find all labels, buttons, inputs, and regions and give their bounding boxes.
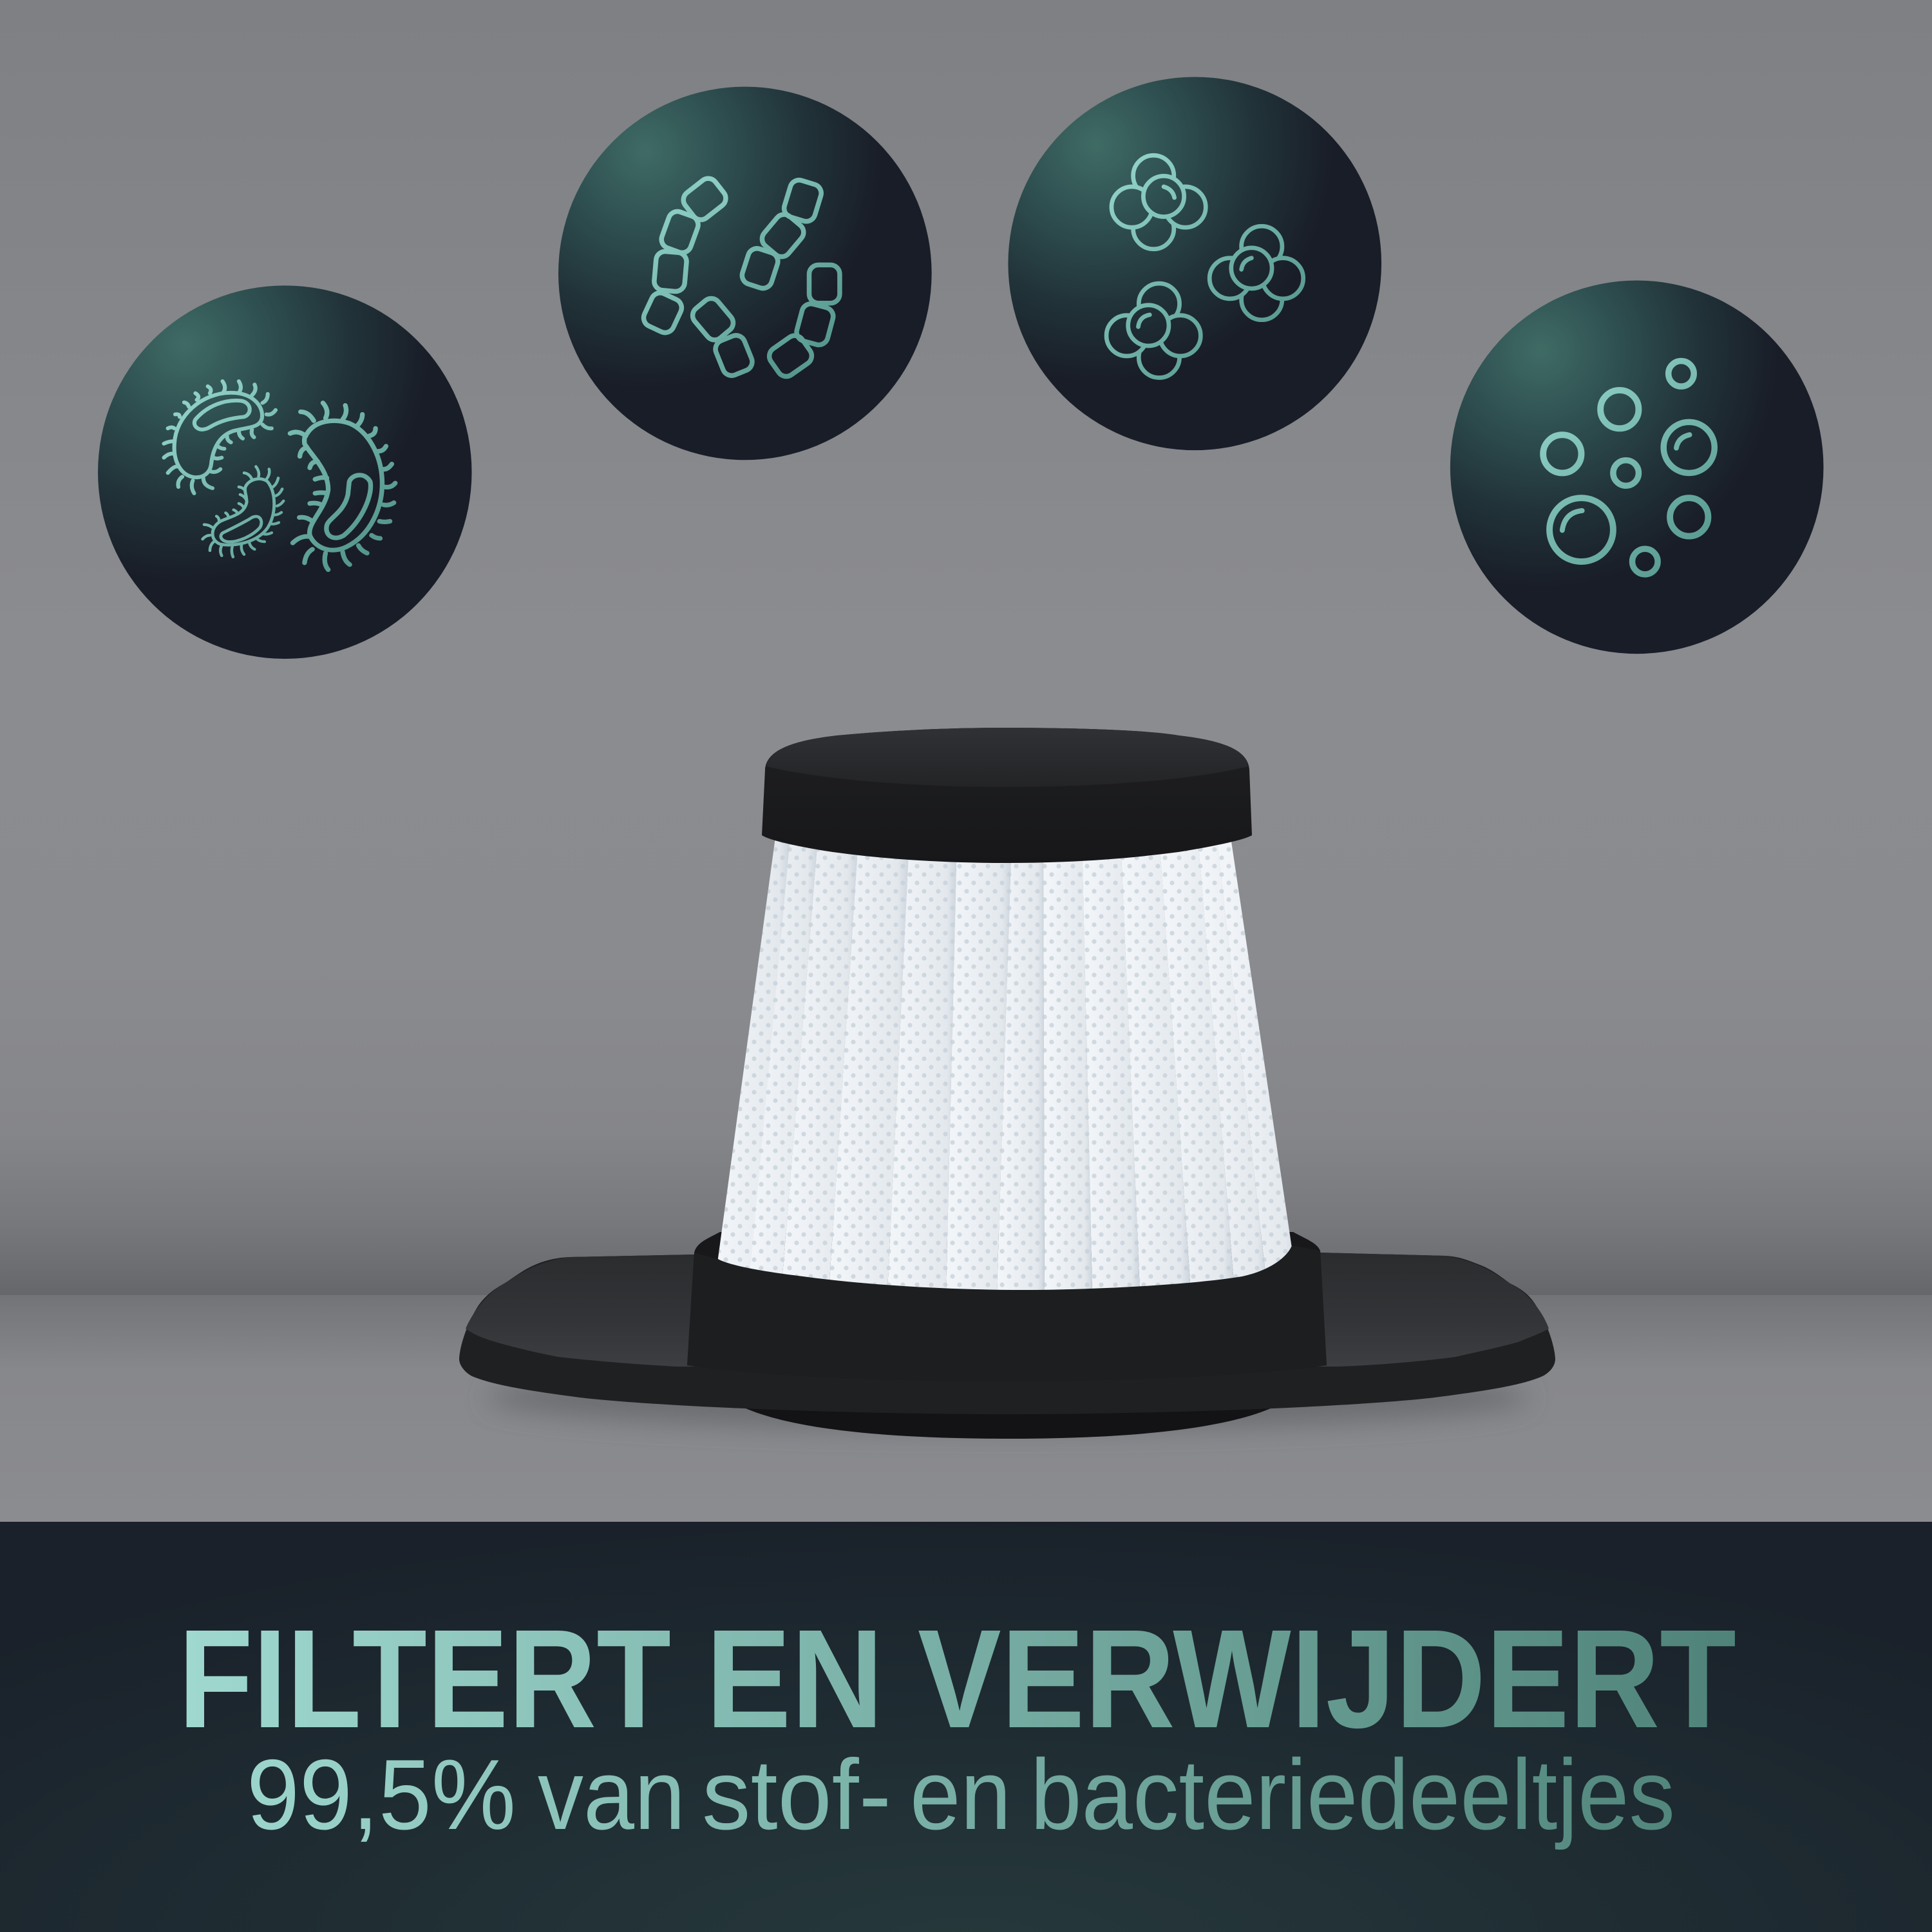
background wall	[0, 0, 1932, 1295]
subtitle: en	[910, 1739, 1011, 1850]
base plate rim	[459, 1253, 1555, 1414]
title: EN	[706, 1601, 884, 1757]
subtitle	[247, 1739, 1675, 1850]
product: vacuum filter	[459, 728, 1555, 1439]
bottom caption band	[0, 1522, 1932, 1932]
cap top surface	[766, 728, 1248, 787]
subtitle: stof-	[702, 1739, 891, 1850]
title: FILTERT	[178, 1601, 671, 1757]
title	[178, 1601, 1736, 1757]
icon disc: dust clusters	[1008, 77, 1381, 450]
floor surface	[0, 1295, 1932, 1522]
icon disc: bubbles	[1450, 281, 1824, 654]
subtitle: van	[538, 1739, 685, 1850]
pleated filter paper	[708, 837, 1301, 1291]
product shadow	[486, 1365, 1530, 1430]
top cap	[762, 728, 1252, 863]
subtitle: 99,5%	[247, 1739, 516, 1850]
collar body and rear rim	[687, 1232, 1327, 1381]
lower hub	[730, 1401, 1286, 1439]
front collar	[687, 1245, 1327, 1381]
base plate surface	[466, 1253, 1549, 1367]
title: VERWIJDERT	[918, 1601, 1736, 1757]
icon disc: curved bacteria	[98, 285, 472, 659]
icon disc: rod bacteria chains	[558, 87, 932, 460]
subtitle: bacteriedeeltjes	[1030, 1739, 1675, 1850]
